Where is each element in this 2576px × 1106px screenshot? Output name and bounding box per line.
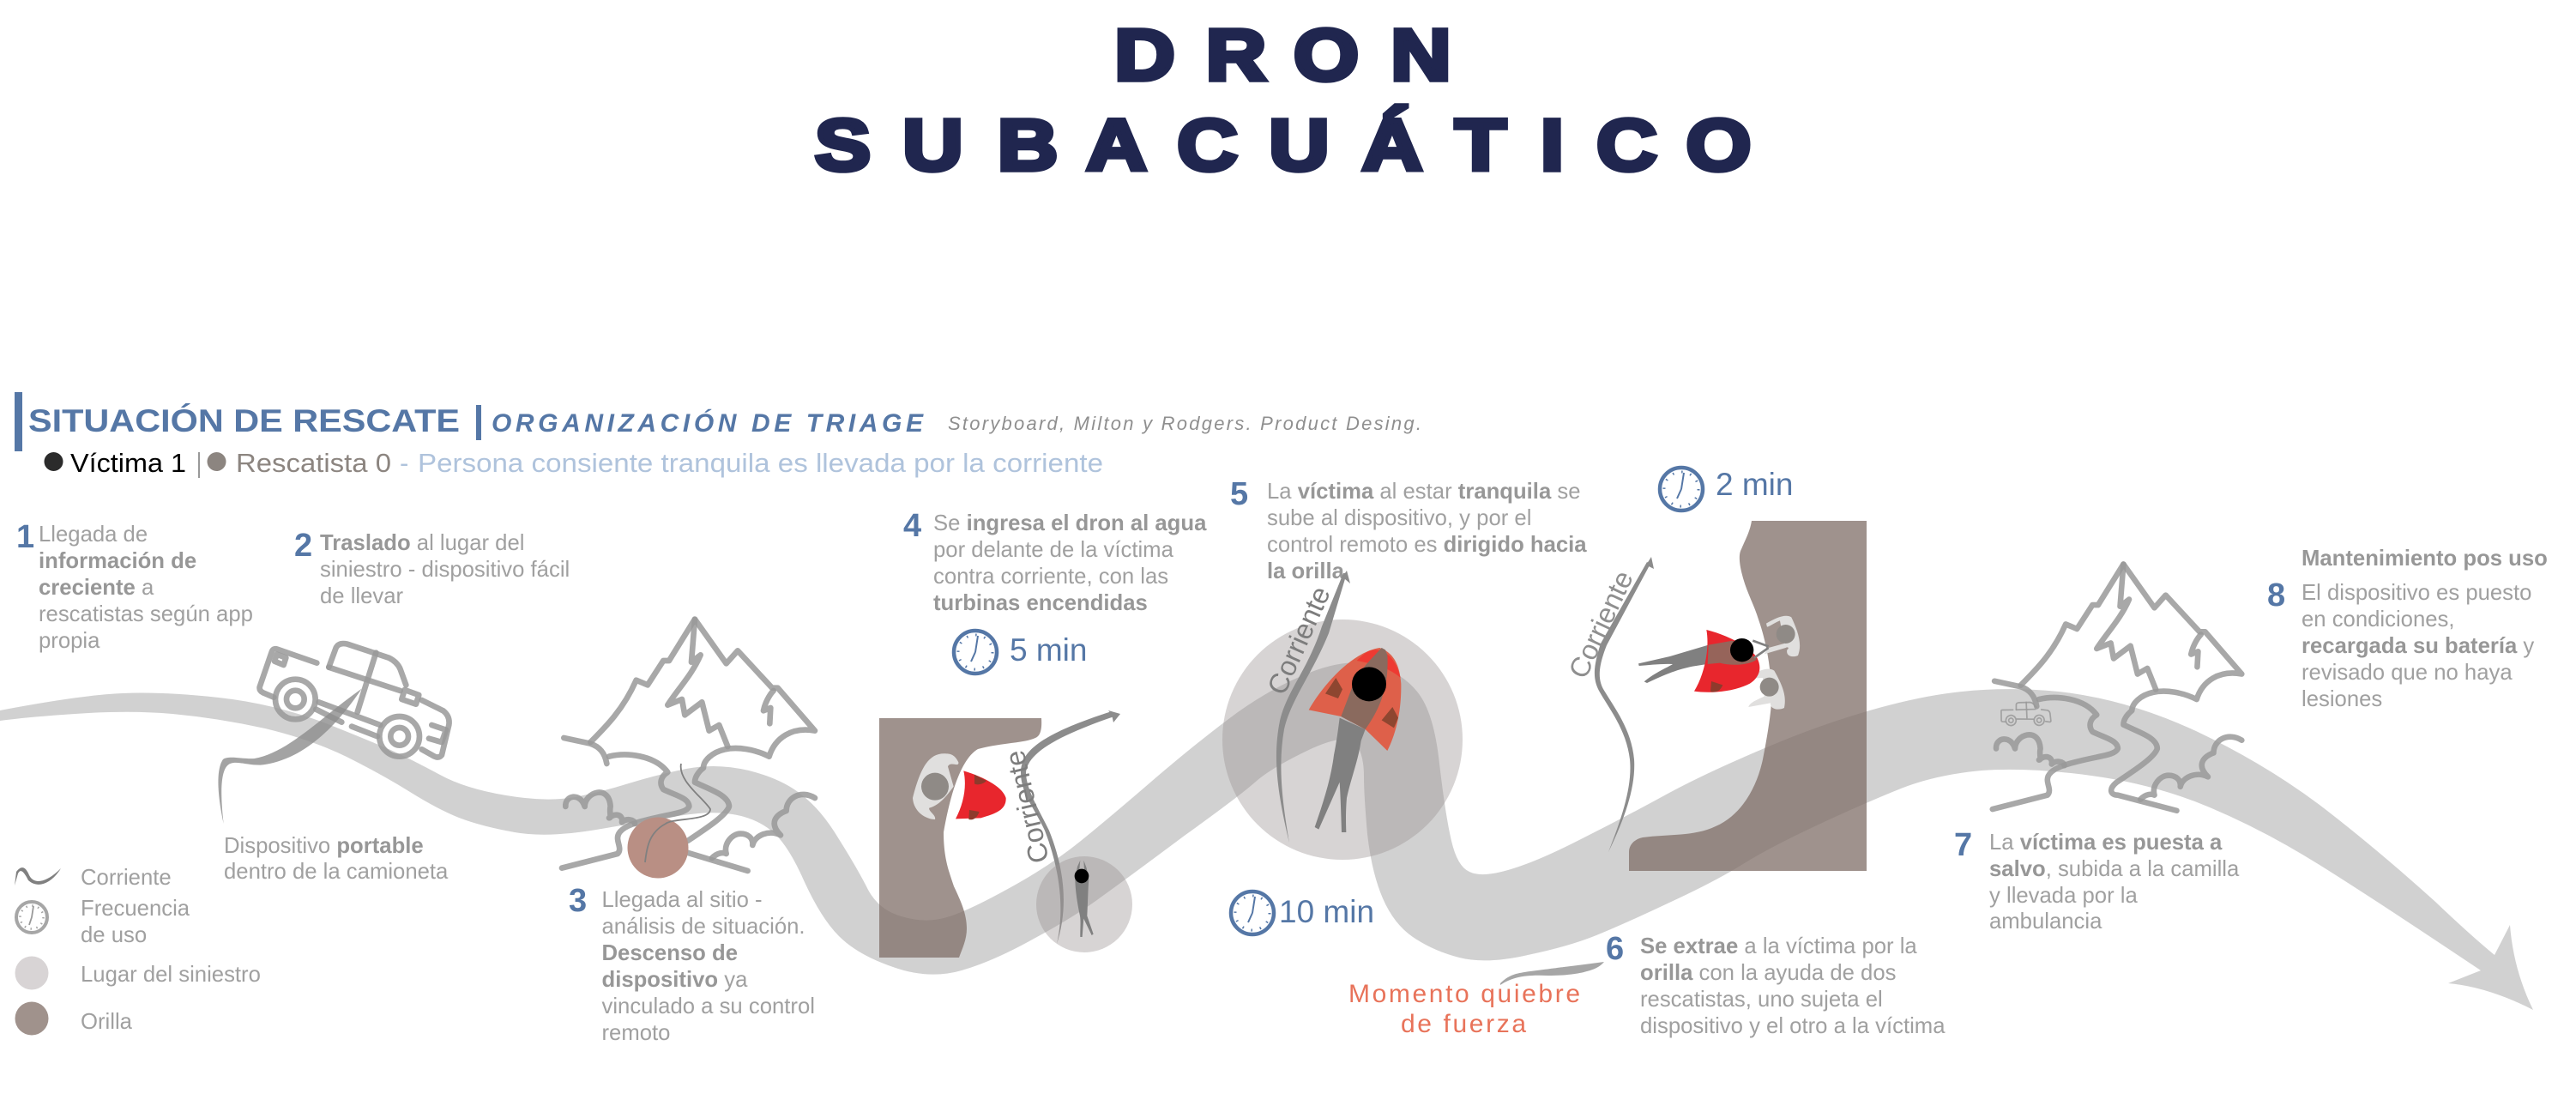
victim [1315,718,1366,832]
step 5 text: 5 [1230,476,1248,512]
step 3 text: análisis de situación. [602,915,805,939]
bank: step 6 shore [1629,521,1867,871]
step 8 text: en condiciones, [2302,607,2455,632]
step 2 text: 2 [294,528,312,564]
victim step 4 [1075,861,1094,937]
lugar del siniestro circle step 5 [1222,619,1463,860]
step 8 text: recargada su batería y [2302,634,2534,658]
small site circle step 4 [1036,856,1132,952]
step 4 text [903,508,1207,615]
swatch: lugar del siniestro [15,956,48,990]
step 4 text: Se ingresa el dron al agua [933,511,1206,535]
label: corriente step 5: Corriente [1262,582,1336,699]
text: dispositivo portable: dentro de la camioneta [224,860,449,884]
rescuer upper [1765,616,1800,656]
text: lugar del siniestro: Lugar del siniestro [81,963,261,987]
step 3 text: Llegada al sitio - [602,888,763,912]
text: frecuencia de uso: Frecuencia [81,897,190,921]
head [1352,667,1386,701]
scenario line: víctima y rescatista: - [400,448,408,478]
step 1 text: Llegada de [39,523,148,547]
step 3 text: vinculado a su control [602,994,815,1018]
step 2 text: de llevar [320,584,404,608]
step 7 text: 7 [1954,827,1972,863]
step 7 text: salvo, subida a la camilla [1989,857,2239,881]
arms [1753,641,1769,658]
head [1730,638,1753,662]
text: dispositivo portable: Dispositivo portable [224,834,424,858]
legend [15,866,261,1035]
icon: mountain site step 3 [562,619,815,871]
step 4 text: turbinas encendidas [933,591,1148,615]
clock: 2 min: 2 min [1716,467,1793,502]
icon: mountain site step 7 [1993,564,2241,811]
step 7 text: y llevada por la [1989,884,2138,908]
device [956,771,1006,819]
text: orilla: Orilla [81,1010,133,1034]
step 1 text: creciente a [39,576,154,600]
clock: 5 min [954,631,1087,674]
step 2 text: Traslado al lugar del [320,531,524,555]
heading: situación de rescate: Storyboard, Milton y Rodgers. Product Desing. [948,413,1421,434]
current arrow step 4 [1021,710,1120,944]
icon: clock legend [16,902,47,933]
river band arrow [0,662,2533,1010]
heading: situación de rescate: SITUACIÓN DE RESCATE [28,402,460,438]
current arrow step 6 [1595,557,1654,852]
step 5 text: la orilla [1267,559,1345,583]
step 6 text: orilla con la ayuda de dos [1640,961,1896,985]
swatch: orilla [15,1002,48,1035]
step 2 text: siniestro - dispositivo fácil [320,558,570,582]
callout: momento quiebre de fuerza: de fuerza [1401,1010,1526,1038]
scenario line: víctima y rescatista: Rescatista 0 [236,448,391,478]
icon: current legend [15,867,61,885]
step 7 text: La víctima es puesta a [1989,831,2222,855]
scenario line: víctima y rescatista: Víctima 1 [70,448,186,478]
step 6 text: 6 [1606,931,1624,967]
heading: situación de rescate [15,392,1421,451]
current arrow step 5 [1276,571,1350,843]
step 5 text: sube al dispositivo, y por el [1267,506,1531,530]
step 3 text [569,883,815,1045]
step 8 text: lesiones [2302,687,2382,711]
rescuer lower [1748,669,1785,710]
step 8 text [2267,547,2548,711]
bank: step 4 shore [879,718,1041,958]
step 1 text: 1 [16,519,34,555]
step 6 text: Se extrae a la víctima por la [1640,934,1917,958]
swoosh to callout [1500,962,1604,985]
step 2 text [294,528,570,608]
current line step 3 [645,764,710,862]
step 5 text: La víctima al estar tranquila se [1267,480,1581,504]
text: corriente: Corriente [81,866,172,890]
device [1309,648,1401,751]
lugar del siniestro step 3 [628,817,688,879]
icon: truck [218,644,449,824]
step 1 text: rescatistas según app [39,602,253,626]
step 4 text: por delante de la víctima [933,538,1174,562]
scene: step 5 victim on device [1309,648,1401,832]
scene: step 4 rescuer and device [913,753,1006,819]
step 5 text: control remoto es dirigido hacia [1267,533,1587,557]
clock: 2 min [1660,467,1793,511]
clock: 10 min: 10 min [1279,894,1374,929]
step 7 text: ambulancia [1989,910,2102,934]
step 1 text: información de [39,549,196,573]
step 6 text: dispositivo y el otro a la víctima [1640,1014,1946,1038]
label: corriente step 4: Corriente [999,747,1055,867]
step 8 text: Mantenimiento pos uso [2302,547,2548,571]
step 8 text: El dispositivo es puesto [2302,581,2531,605]
step 3 text: remoto [602,1021,670,1045]
scenario line: víctima y rescatista: Persona consiente tranquila es llevada por la corriente [418,448,1103,478]
label: corriente step 6: Corriente [1563,566,1639,683]
icon: small ambulance truck [1998,693,2053,737]
step 3 text: Descenso de [602,941,738,965]
torso over device [1341,648,1388,729]
step 8 text: 8 [2267,577,2285,613]
callout: momento quiebre de fuerza: Momento quiebre [1348,980,1580,1008]
step 5 text [1230,476,1587,583]
clock: 5 min: 5 min [1010,632,1087,668]
step 3 text: dispositivo ya [602,968,747,992]
step 1 text: propia [39,629,100,653]
heading: situación de rescate: ORGANIZACIÓN DE TRIAGE [492,408,924,438]
step 4 text: contra corriente, con las [933,565,1168,589]
text: frecuencia de uso: de uso [81,923,147,947]
scenario line: víctima y rescatista [45,448,1103,478]
rescuer [913,753,958,819]
clock: 10 min [1231,891,1374,934]
device [1694,630,1759,692]
scene: step 6 extraction [1638,616,1800,710]
step 6 text [1606,931,1946,1038]
step 8 text: revisado que no haya [2302,661,2513,685]
title [815,15,1751,185]
title: DRON [1114,15,1451,95]
victim legs [1638,645,1709,683]
step 4 text: 4 [903,508,921,544]
step 3 text: 3 [569,883,587,919]
step 7 text [1954,827,2240,934]
title: SUBACUÁTICO [815,106,1751,185]
step 6 text: rescatistas, uno sujeta el [1640,988,1883,1012]
step 1 text [16,519,253,653]
